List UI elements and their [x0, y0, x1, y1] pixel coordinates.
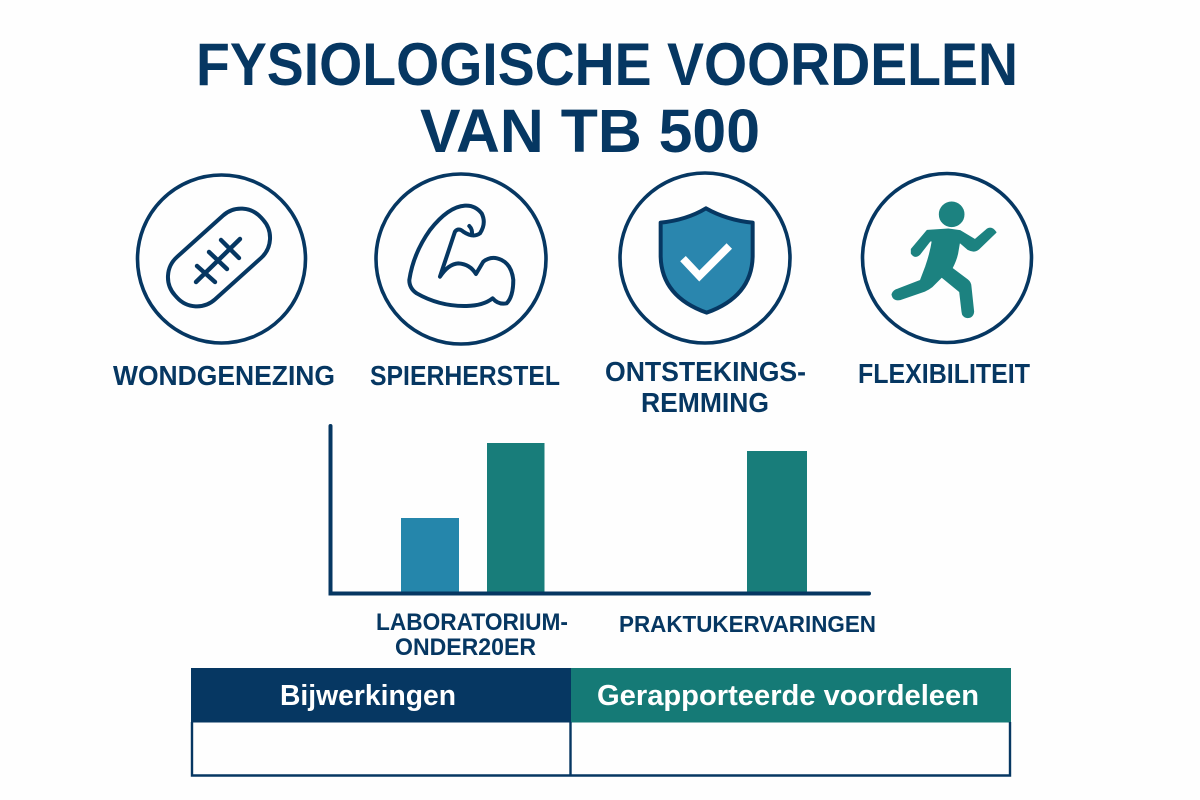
label: ontstekingsremming — [605, 356, 806, 418]
chart axes — [330, 426, 869, 594]
icon: runner — [862, 174, 1032, 342]
bar: laboratorium teal — [487, 443, 544, 593]
label: wondgenezing: WONDGENEZING — [113, 360, 335, 391]
bar: praktijk teal — [747, 451, 807, 593]
label: praktijk: PRAKTUKERVARINGEN — [619, 611, 876, 637]
label: spierherstel: SPIERHERSTEL — [370, 360, 560, 391]
table header: gerapporteerde voordeleen — [571, 668, 1011, 722]
table body — [192, 722, 1010, 776]
icon: flexed arm — [376, 174, 546, 344]
panel: spierherstel — [370, 174, 560, 391]
panel: wondgenezing — [113, 175, 335, 391]
panel: flexibiliteit — [858, 174, 1032, 389]
label: ontstekingsremming: ONTSTEKINGS- — [605, 356, 806, 387]
panel: ontstekingsremming — [605, 173, 806, 418]
table header: gerapporteerde voordeleen: Gerapporteerde voordeleen — [597, 680, 979, 712]
title: VAN TB 500 — [420, 97, 760, 165]
table header: bijwerkingen: Bijwerkingen — [280, 680, 456, 712]
label: laboratorium: ONDER20ER — [395, 634, 536, 661]
label: ontstekingsremming: REMMING — [641, 387, 769, 418]
table header: bijwerkingen — [191, 668, 571, 722]
title: FYSIOLOGISCHE VOORDELEN — [196, 31, 1018, 98]
label: flexibiliteit: FLEXIBILITEIT — [858, 358, 1030, 389]
icon: bandage — [138, 175, 306, 343]
title — [196, 31, 1018, 165]
table — [191, 668, 1011, 776]
label: laboratorium — [376, 609, 568, 661]
bar: laboratorium blue — [401, 518, 459, 593]
label: laboratorium: LABORATORIUM- — [376, 609, 568, 636]
bar chart — [330, 426, 876, 661]
icon: shield with check — [620, 173, 790, 343]
